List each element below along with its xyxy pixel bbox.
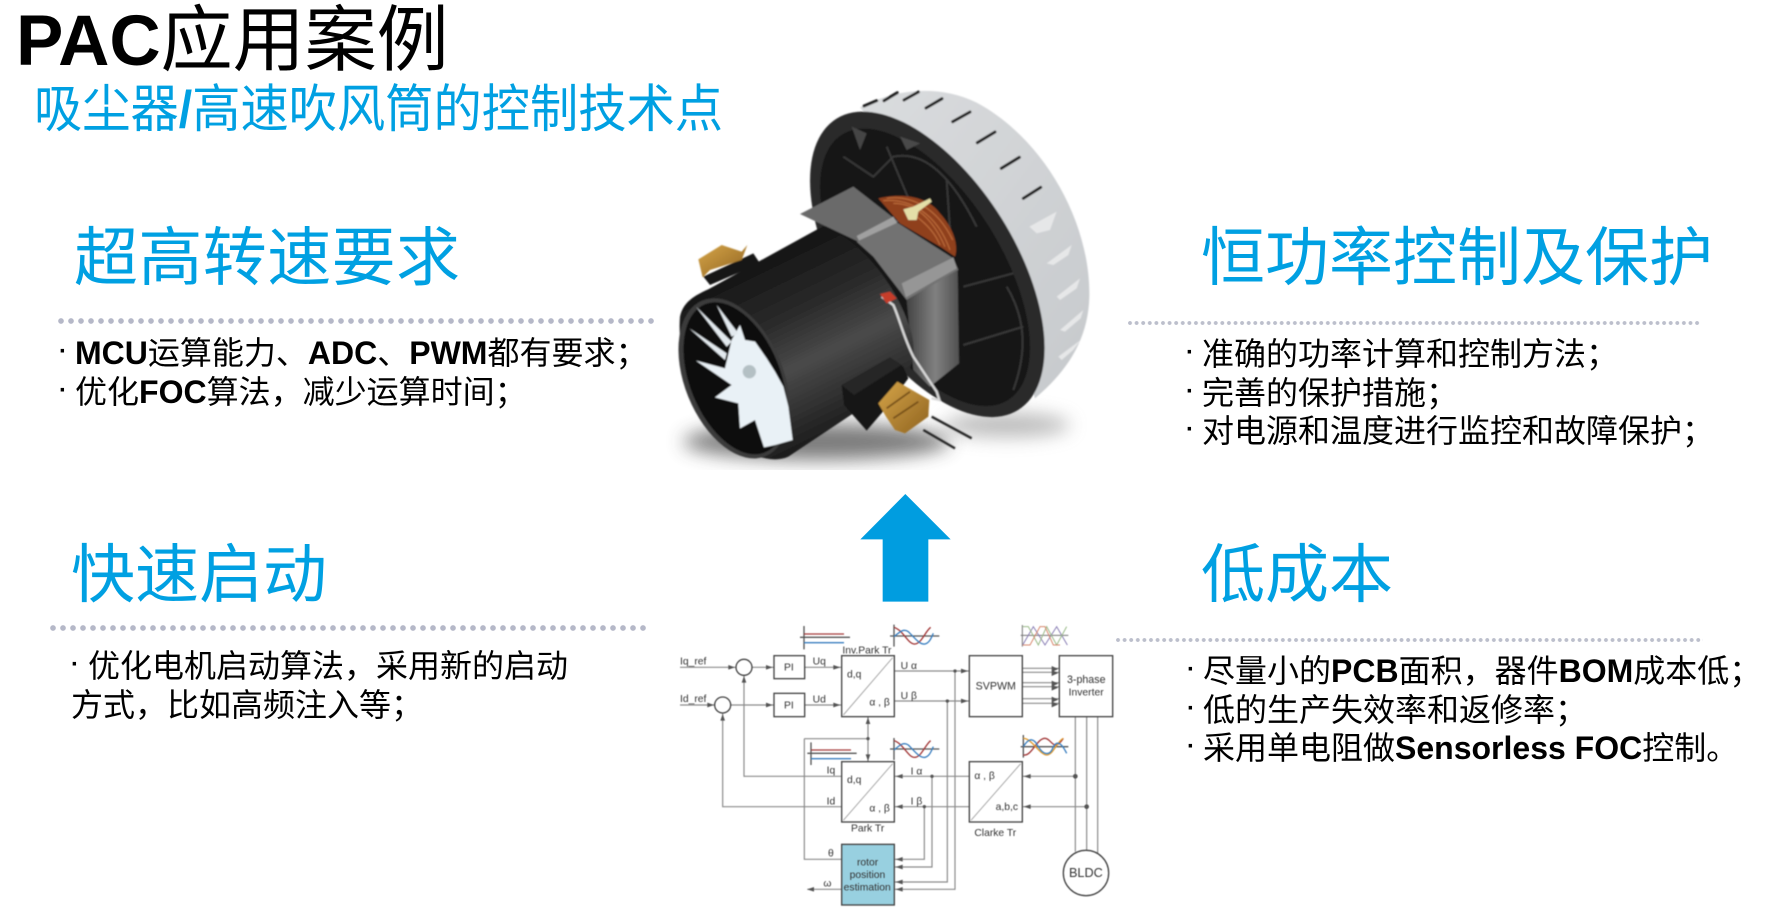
panel: ultra-high speed <box>58 222 654 410</box>
panel: low cost <box>1116 539 1761 766</box>
copper coil <box>878 196 956 257</box>
divider <box>1116 638 1703 642</box>
panel: low cost: · <box>1187 656 1195 683</box>
diagram labels: α , β <box>869 698 890 709</box>
diagram labels: α , β <box>869 803 890 814</box>
diagram labels <box>680 646 1106 894</box>
text block: constant power points: 对电源和温度进行监控和故障保护； <box>1202 413 1714 449</box>
cylinder body <box>680 226 914 459</box>
panel: constant power: · <box>1186 339 1194 366</box>
divider <box>1128 321 1701 325</box>
diagram labels: SVPWM <box>976 680 1016 692</box>
housing ring <box>860 91 1089 398</box>
text block: fast start points: 方式，比如高频注入等； <box>71 687 423 723</box>
diagram labels: Id <box>827 796 836 807</box>
fan opening <box>677 298 786 460</box>
heading: low cost: 低成本 <box>1201 539 1393 611</box>
panel: low cost: · <box>1187 733 1195 760</box>
divider <box>50 625 648 631</box>
diagram labels: PI <box>784 700 794 711</box>
diagram labels: Park Tr <box>851 824 885 835</box>
diagram labels: Uq <box>813 657 826 668</box>
diagram labels: I α <box>911 766 922 777</box>
text block: low cost points: 尽量小的PCB面积，器件BOM成本低； <box>1203 653 1761 689</box>
laminated core <box>907 270 959 387</box>
text block: constant power points: 准确的功率计算和控制方法； <box>1202 336 1618 372</box>
diagram labels: ω <box>823 879 831 890</box>
text block: ultra-high speed points: 优化FOC算法，减少运算时间； <box>75 374 527 410</box>
diagram labels: θ <box>828 849 834 860</box>
blocks <box>715 656 1113 905</box>
heading: ultra-high speed: 超高转速要求 <box>74 222 460 294</box>
wire <box>882 297 939 400</box>
shadow <box>683 423 950 460</box>
text block: fast start points: 优化电机启动算法，采用新的启动 <box>88 648 568 684</box>
diagram labels: α , β <box>974 771 995 782</box>
diagram labels: 3-phase <box>1067 674 1106 686</box>
cable tie <box>903 198 932 220</box>
diagram labels: estimation <box>844 883 891 894</box>
diagram labels: position <box>850 870 886 881</box>
panel: constant power: · <box>1186 416 1194 443</box>
diagram labels: Iq <box>827 766 836 777</box>
brass terminal bottom <box>878 382 929 433</box>
brass terminal top <box>703 253 760 285</box>
diagram labels: U α <box>901 661 917 672</box>
panel: constant power <box>1128 222 1714 449</box>
diagram labels: PI <box>784 663 794 674</box>
diagram labels: U β <box>901 691 917 702</box>
ribs <box>1029 212 1083 360</box>
diagram labels: d,q <box>847 669 862 680</box>
panel: ultra-high speed: · <box>59 338 67 365</box>
panel: ultra-high speed: · <box>59 377 67 404</box>
fan blades <box>696 325 793 447</box>
text block: low cost points <box>1187 653 1761 766</box>
diagram labels: a,b,c <box>996 802 1018 813</box>
panel: low cost: · <box>1187 695 1195 722</box>
text block: low cost points: 采用单电阻做Sensorless FOC控制。 <box>1203 730 1738 766</box>
diagram labels: d,q <box>847 775 862 786</box>
title: PAC应用案例 <box>16 1 449 81</box>
slots <box>864 92 1041 198</box>
diagram labels: Clarke Tr <box>974 828 1017 839</box>
arrowheads <box>707 665 1089 892</box>
heading: fast start: 快速启动 <box>71 539 327 611</box>
text block: low cost points: 低的生产失效率和返修率； <box>1203 692 1587 728</box>
heading: constant power: 恒功率控制及保护 <box>1201 222 1713 294</box>
text block: fast start points: · <box>71 651 79 678</box>
icon: vacuum motor photo <box>675 90 1090 470</box>
diagram labels: BLDC <box>1069 866 1103 880</box>
text block: constant power points <box>1186 336 1714 449</box>
brush holder <box>842 357 908 431</box>
diagram labels: Id_ref <box>680 694 707 705</box>
diagram labels: Inv.Park Tr <box>842 646 892 657</box>
text block: constant power points: 完善的保护措施； <box>1202 375 1458 411</box>
diagram labels: I β <box>911 796 922 807</box>
diagram labels: Iq_ref <box>680 656 707 667</box>
diagram labels: Ud <box>813 694 826 705</box>
diagram labels: rotor <box>857 857 879 868</box>
subtitle: 吸尘器/高速吹风筒的控制技术点 <box>34 80 723 138</box>
panel: constant power: · <box>1186 378 1194 405</box>
diagram labels: Inverter <box>1069 688 1104 699</box>
panel: fast start <box>50 539 646 723</box>
text block: fast start points <box>71 648 568 723</box>
signal lines <box>680 667 1098 889</box>
back disk <box>808 110 1046 418</box>
black cables <box>923 417 972 448</box>
mini charts <box>800 625 1068 765</box>
text block: ultra-high speed points: MCU运算能力、ADC、PWM都有要求； <box>75 335 647 371</box>
text block: ultra-high speed points <box>59 335 647 410</box>
stator block <box>800 187 898 242</box>
divider <box>58 318 658 324</box>
